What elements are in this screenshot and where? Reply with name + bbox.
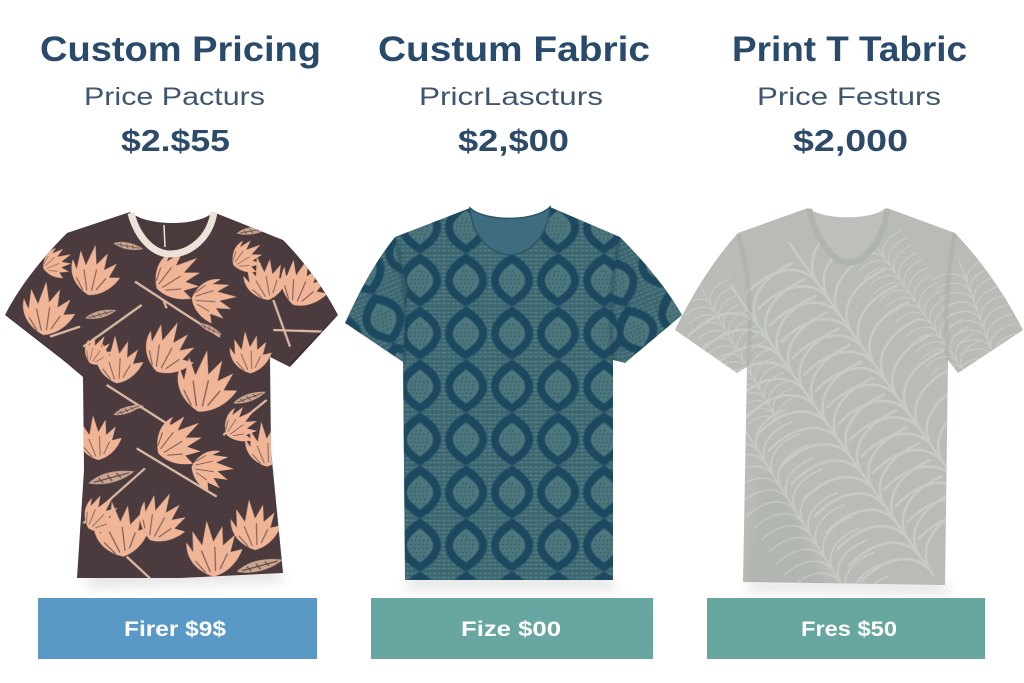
title: Custum Fabric: Custum Fabric <box>378 30 650 69</box>
subtitle: Price Festurs: Price Festurs <box>757 83 941 111</box>
price: $2,$00: $2,$00 <box>458 123 569 158</box>
neck ribbing <box>809 209 887 263</box>
neck ribbing <box>470 207 550 255</box>
column 2 heading <box>378 30 650 158</box>
column 3 heading <box>732 30 967 158</box>
button: Fres $50: Fres $50 <box>801 618 897 641</box>
button: Firer $9$ <box>38 598 317 659</box>
price: $2.$55: $2.$55 <box>121 123 230 158</box>
t-shirt: grey frond <box>675 208 1023 596</box>
button: Fres $50 <box>707 598 985 659</box>
button: Fize $00 <box>371 598 653 659</box>
column 1 heading <box>40 30 321 158</box>
button: Firer $9$: Firer $9$ <box>124 618 226 641</box>
price: $2,000: $2,000 <box>793 123 908 158</box>
subtitle: PricrLascturs: PricrLascturs <box>419 83 603 111</box>
subtitle: Price Pacturs: Price Pacturs <box>84 83 265 111</box>
neck ribbing <box>131 212 214 254</box>
t-shirt: teal geometric <box>340 200 685 590</box>
title: Print T Tabric: Print T Tabric <box>732 30 967 69</box>
title: Custom Pricing: Custom Pricing <box>40 30 321 69</box>
t-shirt: floral brown <box>0 190 345 590</box>
button: Fize $00: Fize $00 <box>461 618 561 641</box>
